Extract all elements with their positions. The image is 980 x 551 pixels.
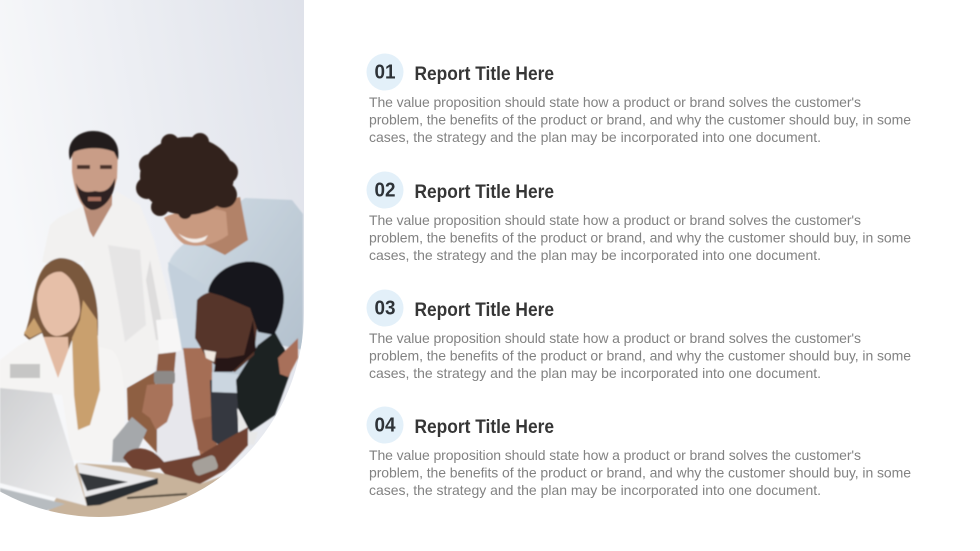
body text 03: cases, the strategy and the plan may be incorporated into one document. bbox=[369, 365, 821, 381]
man in white shirt bbox=[42, 131, 182, 453]
body text 04: The value proposition should state how a product or brand solves the customer's bbox=[369, 447, 861, 463]
photo: team around a laptop bbox=[0, 0, 304, 530]
heading 02: Report Title Here bbox=[414, 181, 554, 203]
body text 01: cases, the strategy and the plan may be incorporated into one document. bbox=[369, 129, 821, 145]
number badge 03 bbox=[366, 290, 404, 326]
heading 04: Report Title Here bbox=[414, 416, 554, 438]
body text 01: The value proposition should state how a product or brand solves the customer's bbox=[369, 94, 861, 110]
body text 04: cases, the strategy and the plan may be incorporated into one document. bbox=[369, 482, 821, 498]
body text 04 bbox=[369, 447, 911, 498]
photo figures bbox=[0, 131, 303, 530]
body text 02: The value proposition should state how a product or brand solves the customer's bbox=[369, 212, 861, 228]
man with curly hair bbox=[136, 133, 303, 455]
body text 02: cases, the strategy and the plan may be incorporated into one document. bbox=[369, 247, 821, 263]
laptop bbox=[0, 388, 158, 512]
number badge 04: 04 bbox=[374, 414, 396, 436]
photo background wall bbox=[0, 0, 304, 520]
number badge 01: 01 bbox=[374, 62, 396, 84]
man in black shirt bbox=[123, 262, 298, 484]
item 04 bbox=[366, 406, 911, 498]
body text 03 bbox=[369, 330, 911, 381]
body text 01 bbox=[369, 94, 911, 145]
number badge 04 bbox=[366, 406, 404, 444]
gap of wall behind arms bbox=[154, 350, 201, 463]
body text 02 bbox=[369, 212, 911, 263]
table bbox=[48, 462, 223, 517]
heading 01: Report Title Here bbox=[414, 63, 554, 85]
body text 04: problem, the benefits of the product or brand, and why the customer should buy, in some bbox=[369, 464, 911, 480]
body text 03: problem, the benefits of the product or brand, and why the customer should buy, in some bbox=[369, 348, 911, 364]
number badge 01 bbox=[366, 54, 404, 90]
number badge 02 bbox=[366, 172, 404, 208]
item 01 bbox=[366, 54, 911, 145]
body text 02: problem, the benefits of the product or brand, and why the customer should buy, in some bbox=[369, 230, 911, 246]
woman with blond hair bbox=[0, 258, 147, 463]
heading 03: Report Title Here bbox=[414, 299, 554, 321]
item 02 bbox=[366, 172, 911, 263]
body text 01: problem, the benefits of the product or brand, and why the customer should buy, in some bbox=[369, 112, 911, 128]
item 03 bbox=[366, 290, 911, 381]
body text 03: The value proposition should state how a product or brand solves the customer's bbox=[369, 330, 861, 346]
number badge 02: 02 bbox=[374, 180, 396, 202]
number badge 03: 03 bbox=[374, 298, 396, 320]
